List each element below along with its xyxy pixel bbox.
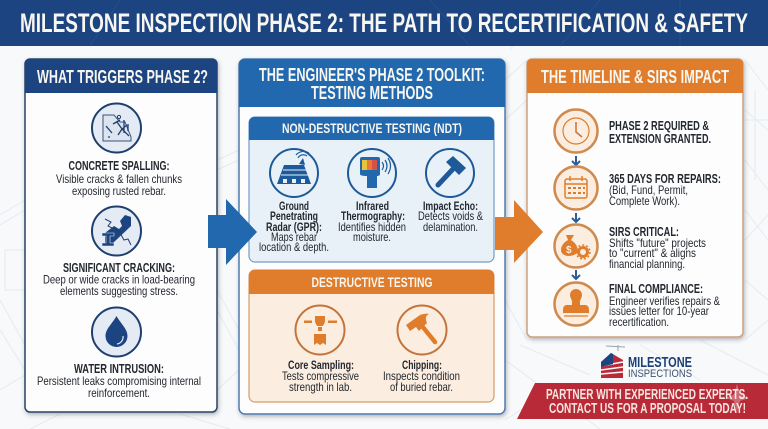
text: infrared thermography: Thermography: (341, 209, 405, 223)
text: impact echo: delamination. (423, 220, 478, 234)
text: impact echo (418, 199, 483, 234)
text: SIRS critical: SIRS CRITICAL: (609, 225, 679, 239)
text: infrared thermography (338, 199, 406, 244)
text: SIRS critical: Shifts "future" projects (609, 236, 706, 250)
text: chipping: Chipping: (402, 358, 442, 372)
text: phase 2 required: PHASE 2 REQUIRED & (609, 119, 709, 133)
logo: Milestone Inspections: MILESTONE (628, 355, 692, 371)
text: core sampling: Core Sampling: (288, 358, 354, 372)
text: core sampling: Tests compressive (282, 369, 359, 383)
sub-heading: NDT: NON-DESTRUCTIVE TESTING (NDT) (282, 121, 462, 136)
sub-heading: NDT (249, 117, 494, 140)
call to action banner (517, 383, 768, 419)
panel: timeline and SIRS impact (527, 59, 743, 337)
sub-panel: destructive testing (249, 270, 494, 402)
text: significant cracking (43, 261, 195, 298)
text: ground penetrating radar: Ground (279, 199, 309, 213)
text: SIRS critical: to "current" & aligns (609, 246, 696, 260)
panel heading: triggers: WHAT TRIGGERS PHASE 2? (37, 67, 208, 87)
icon: calendar (554, 166, 598, 210)
arrow: step 2 to 3 (572, 213, 580, 222)
text: chipping (383, 358, 460, 394)
text: infrared thermography: moisture. (353, 230, 391, 244)
icon: impact echo hammer (426, 149, 474, 197)
text: infrared thermography: Infrared (356, 199, 389, 213)
logo: Milestone Inspections: INSPECTIONS (628, 368, 692, 380)
sub-panel: non-destructive testing (249, 117, 494, 262)
icon: stamp (554, 282, 598, 326)
panel heading: timeline (527, 59, 743, 93)
text: infrared thermography: Identifies hidden (338, 220, 406, 234)
text: water intrusion (37, 362, 201, 400)
text: concrete spalling: Visible cracks & fallen chunks (56, 172, 182, 186)
text: phase 2 required (609, 119, 711, 146)
icon: ground penetrating radar (270, 149, 318, 197)
icon: water drop (92, 308, 141, 356)
icon: chipping hammer (398, 306, 446, 354)
text: significant cracking: elements suggesting stress. (60, 284, 178, 298)
text: final compliance (609, 282, 720, 329)
text: 365 days: 365 DAYS FOR REPAIRS: (609, 172, 721, 186)
icon: money bag and gear (554, 224, 598, 268)
text: impact echo: Impact Echo: (423, 199, 478, 213)
panel heading: toolkit: TESTING METHODS (311, 83, 433, 103)
panel heading: toolkit (239, 59, 505, 107)
icon: concrete spalling (92, 104, 141, 152)
arrow: step 3 to 4 (572, 270, 580, 279)
sub-heading: destructive testing: DESTRUCTIVE TESTING (312, 275, 432, 290)
text: significant cracking: SIGNIFICANT CRACKING: (63, 261, 175, 275)
text: SIRS critical: financial planning. (609, 257, 685, 271)
arrow: orange, toolkit to timeline (495, 200, 543, 263)
text: impact echo: Detects voids & (418, 209, 483, 223)
text: final compliance: recertification. (609, 315, 669, 329)
icon: clock (554, 110, 598, 152)
text: significant cracking: Deep or wide cracks in load-bearing (43, 272, 195, 286)
text: 365 days (609, 172, 721, 208)
panel heading: triggers (25, 59, 217, 93)
text: core sampling (282, 358, 359, 394)
arrow: step 1 to 2 (572, 156, 580, 165)
panel: what triggers phase 2 (25, 59, 217, 412)
text: final compliance: issues letter for 10-year (609, 304, 709, 318)
text: ground penetrating radar: Maps rebar (271, 230, 317, 244)
text: ground penetrating radar: Radar (GPR): (266, 220, 322, 234)
icon: core sampling (296, 306, 344, 354)
panel heading: toolkit: THE ENGINEER'S PHASE 2 TOOLKIT: (259, 65, 485, 85)
text: ground penetrating radar: location & depth. (259, 240, 329, 254)
panel: engineer's toolkit (239, 59, 505, 414)
text: SIRS critical (609, 225, 706, 271)
logo: Milestone Inspections (601, 345, 692, 380)
text: ground penetrating radar: Penetrating (270, 209, 318, 223)
icon: significant cracking (92, 206, 141, 256)
text: final compliance: FINAL COMPLIANCE: (609, 282, 703, 296)
arrow: blue, triggers to toolkit (208, 199, 257, 265)
icon: money bag and gear: $ (566, 245, 572, 256)
text: chipping: Inspects condition (383, 369, 460, 383)
icon: infrared thermography camera (348, 149, 396, 197)
text: 365 days: (Bid, Fund, Permit, (609, 183, 688, 197)
text: ground penetrating radar (259, 199, 329, 254)
sub-heading: destructive testing (249, 270, 494, 294)
text: water intrusion: reinforcement. (88, 386, 150, 400)
text: water intrusion: WATER INTRUSION: (74, 362, 164, 376)
text: final compliance: Engineer verifies repairs & (609, 294, 720, 308)
text: water intrusion: Persistent leaks compromising internal (37, 374, 201, 388)
text: concrete spalling: CONCRETE SPALLING: (68, 159, 170, 173)
text: concrete spalling (56, 159, 182, 198)
text: phase 2 required: EXTENSION GRANTED. (609, 132, 711, 146)
text: concrete spalling: exposing rusted rebar. (72, 184, 166, 198)
title banner (0, 0, 768, 46)
text: 365 days: Complete Work). (609, 194, 680, 208)
text: core sampling: strength in lab. (289, 380, 352, 394)
text: chipping: of buried rebar. (390, 380, 453, 394)
